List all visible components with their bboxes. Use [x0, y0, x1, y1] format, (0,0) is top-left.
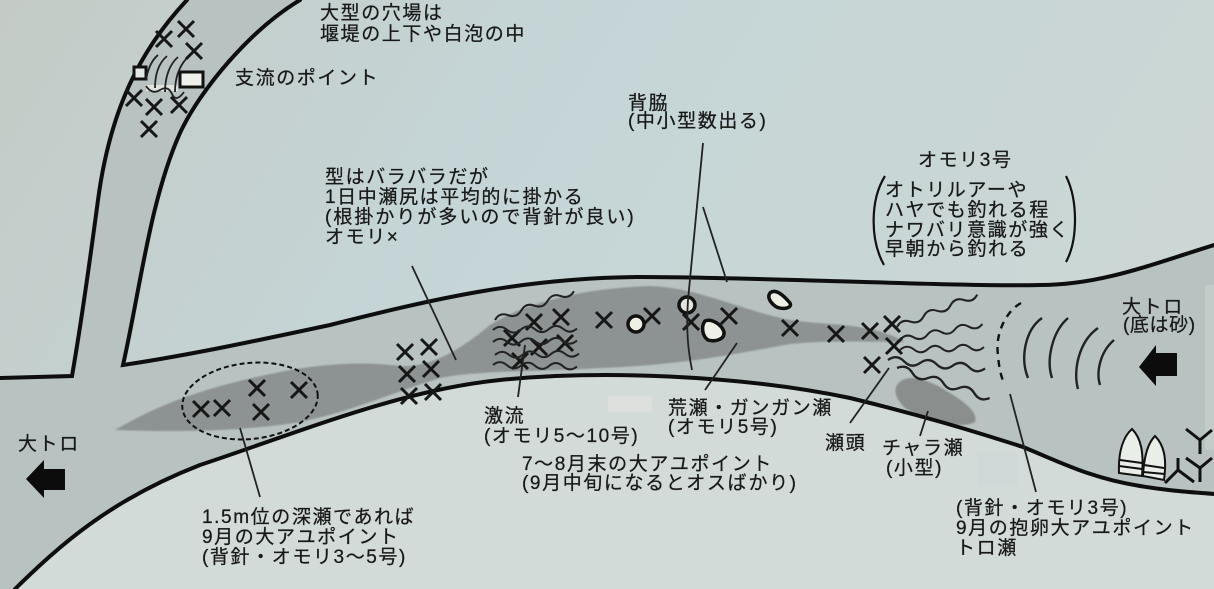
- deep water shading: [115, 286, 905, 431]
- label: deep run: (背針・オモリ3～5号): [202, 546, 407, 568]
- label: territory note: ナワバリ意識が強く: [885, 219, 1070, 241]
- label: summer ayu point: (9月中旬になるとオスばかり): [522, 472, 798, 494]
- chara shoal shading: [895, 378, 975, 425]
- label: rough rapids: (オモリ5号): [668, 417, 778, 438]
- label: big pool upstream: 大トロ: [1122, 297, 1184, 318]
- paper patches: [608, 285, 1214, 487]
- label: summer ayu point: 7～8月末の大アユポイント: [522, 454, 773, 475]
- rapids wavy lines: [493, 288, 579, 369]
- label: territory note: 早朝から釣れる: [885, 238, 1029, 260]
- label: rapids tail note: オモリ×: [325, 227, 400, 248]
- label: egg-bearing ayu point: トロ瀬: [956, 537, 1018, 559]
- label: egg-bearing ayu point: (背針・オモリ3号): [956, 498, 1128, 519]
- label: big pool upstream: (底は砂): [1123, 314, 1196, 336]
- label: tributary point: 支流のポイント: [235, 67, 379, 89]
- arrow: upstream current: [1139, 345, 1177, 386]
- lower land: [15, 375, 1214, 589]
- label: egg-bearing ayu point: 9月の抱卵大アユポイント: [956, 517, 1195, 539]
- weir: [134, 55, 203, 98]
- label: shallow rapids: (小型): [886, 457, 943, 479]
- leader lines: [240, 143, 1036, 497]
- label: territory note: オトリルアーや: [885, 180, 1028, 201]
- dashed boundary: [997, 303, 1021, 384]
- boats: [1119, 429, 1165, 480]
- label: rapids tail note: 1日中瀬尻は平均的に掛かる: [325, 186, 584, 208]
- label: deep run: 9月の大アユポイント: [202, 526, 400, 548]
- rocks: [628, 291, 790, 341]
- label: big pool downstream: 大トロ: [18, 433, 80, 455]
- label: deep run: 1.5m位の深瀬であれば: [202, 507, 415, 528]
- label: large fish spots: 堰堤の上下や白泡の中: [320, 23, 526, 45]
- label: head of rapids: 瀬頭: [825, 432, 866, 454]
- tree symbols: [1165, 429, 1212, 483]
- deep pool dashed ellipse: [178, 356, 322, 446]
- label: back vein: 背脇: [628, 93, 669, 114]
- label: torrent: 激流: [484, 406, 525, 427]
- label: torrent: (オモリ5～10号): [484, 426, 639, 447]
- arrow: downstream current: [26, 460, 65, 498]
- label: large fish spots: 大型の穴場は: [320, 3, 444, 24]
- current arcs: [1024, 318, 1114, 389]
- label: shallow rapids: チャラ瀬: [882, 438, 964, 459]
- label: rapids tail note: (根掛かりが多いので背針が良い): [325, 206, 636, 228]
- cross marks: fishing points: [126, 21, 902, 420]
- label: rough rapids: 荒瀬・ガンガン瀬: [668, 398, 833, 419]
- label: back vein: (中小型数出る): [628, 110, 767, 132]
- label: sinker note: オモリ3号: [918, 150, 1013, 171]
- label: rapids tail note: 型はバラバラだが: [325, 167, 490, 188]
- head-of-rapids wavy lines: [888, 292, 991, 401]
- bracket: right side of note: [874, 176, 1075, 265]
- label: territory note: ハヤでも釣れる程: [885, 199, 1050, 221]
